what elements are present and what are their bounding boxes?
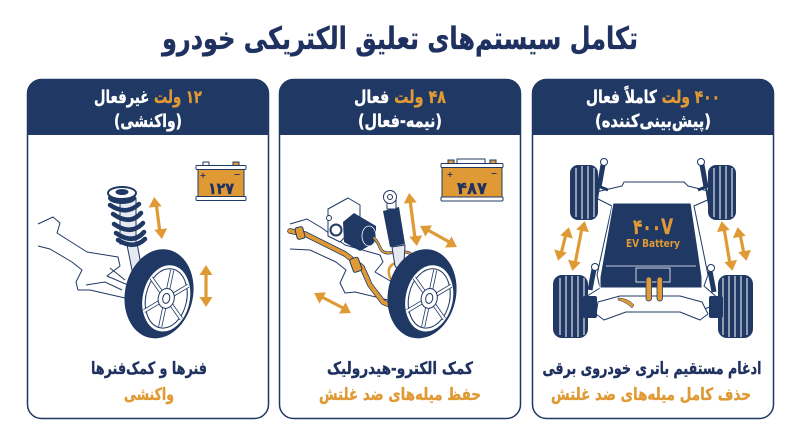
illustration: chassis arm <box>290 219 392 300</box>
illustration: control arm <box>38 217 128 298</box>
illustration: wheel <box>116 243 202 345</box>
header: 12 volt: (واکنشی) <box>114 111 182 132</box>
header: 12 volt: ۱۲ ولت غیرفعال <box>94 87 202 108</box>
icon: 48V battery: ۴۸۷ <box>457 179 488 199</box>
caption: 12 volt: فنرها و کمک‌فنرها <box>91 359 207 379</box>
caption: 48 volt: حفظ میله‌های ضد غلتش <box>319 385 481 405</box>
icon: arrow strut <box>403 192 423 247</box>
illustration: wheel <box>379 243 465 345</box>
illustration: wheels <box>553 165 753 338</box>
illustration: strut <box>127 243 143 280</box>
icon: arrows left <box>552 220 591 272</box>
caption: 400 volt <box>542 359 762 405</box>
caption: 12 volt <box>91 359 207 405</box>
icon: 12V battery: − <box>234 170 240 179</box>
header: 400 volt: ۴۰۰ ولت کاملاً فعال <box>586 85 720 108</box>
illustration: shock absorber <box>383 190 405 272</box>
icon: 48V battery: − <box>491 169 497 178</box>
illustration: motor actuator <box>326 198 376 251</box>
header: 48 volt: (نیمه-فعال) <box>358 111 442 132</box>
illustration: EV battery: EV Battery <box>626 238 680 250</box>
title: تکامل سیستم‌های تعلیق الکتریکی خودرو <box>160 21 638 57</box>
panel: 48 volt semi-active <box>279 79 521 418</box>
header: 400 volt <box>532 79 774 135</box>
icon: 48V battery: + <box>447 170 453 179</box>
icon: 12V battery <box>196 162 246 200</box>
icon: vertical arrow strut <box>148 196 168 240</box>
header: 400 volt: (پیش‌بینی‌کننده) <box>595 111 711 132</box>
illustration: battery cables <box>618 277 662 308</box>
icon: vertical arrow wheel <box>200 265 212 307</box>
header: 48 volt <box>279 79 521 135</box>
caption: 48 volt <box>319 359 481 405</box>
icon: arrow diagonal upper <box>417 220 460 253</box>
icon: arrows right <box>715 220 753 272</box>
panel: 400 volt fully active <box>532 79 774 418</box>
illustration: chassis frame <box>574 182 720 320</box>
icon: 12V battery: ۱۲۷ <box>208 179 234 198</box>
header: 48 volt: ۴۸ ولت فعال <box>354 87 446 108</box>
illustration: shock absorbers <box>590 158 714 292</box>
illustration: anti-roll bar <box>290 226 412 306</box>
caption: 12 volt: واکنشی <box>124 385 174 405</box>
icon: arrow diagonal lower <box>311 287 354 319</box>
icon: 48V battery <box>441 159 503 201</box>
icon: 12V battery: + <box>200 171 206 180</box>
illustration: coil spring <box>108 187 145 245</box>
illustration: EV battery: ۴۰۰V <box>633 215 674 239</box>
caption: 48 volt: کمک الکترو-هیدرولیک <box>327 359 473 379</box>
caption: 400 volt: حذف کامل میله‌های ضد غلتش <box>551 385 751 405</box>
header: 12 volt <box>27 79 268 135</box>
illustration: EV battery <box>600 203 702 288</box>
panel: 12 volt passive <box>27 79 268 418</box>
